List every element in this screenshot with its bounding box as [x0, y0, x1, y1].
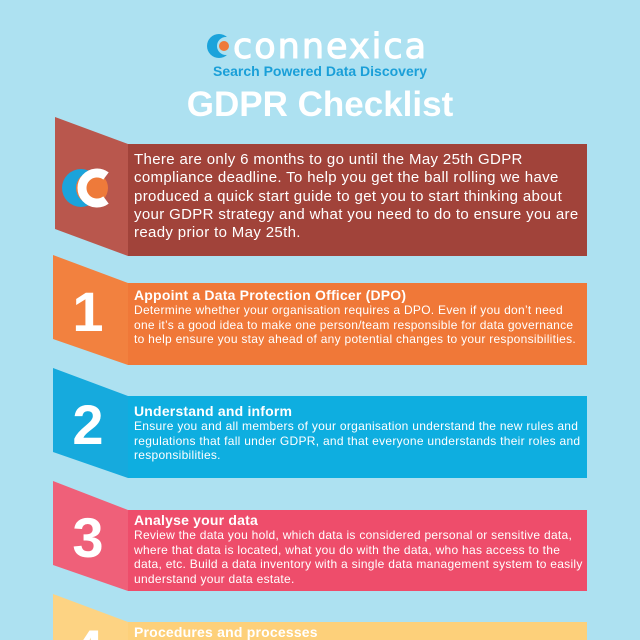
step 3 text: data, etc. Build a data inventory with a single data management system to easily: [134, 557, 583, 571]
intro text: compliance deadline. To help you get the ball rolling we have: [134, 169, 559, 186]
number 3: 3: [72, 506, 104, 569]
step 1 text: to help ensure you stay ahead of any potential changes to your responsibilities.: [134, 332, 576, 346]
step 3 text: [134, 512, 583, 586]
step 2 text: responsibilities.: [134, 448, 221, 462]
step 1 text: [134, 287, 576, 346]
step 1 text: one it’s a good idea to make one person/team responsible for data governance: [134, 318, 573, 332]
step 1 text: Appoint a Data Protection Officer (DPO): [134, 287, 406, 303]
intro text: [134, 151, 579, 241]
step 3 text: Review the data you hold, which data is considered personal or sensitive data,: [134, 528, 572, 542]
number 1: 1: [72, 280, 104, 343]
title: GDPR Checklist: [187, 85, 453, 124]
intro text: produced a quick start guide to get you to start thinking about: [134, 188, 562, 205]
intro text: There are only 6 months to go until the May 25th GDPR: [134, 151, 523, 168]
logo: [207, 27, 428, 67]
intro text: your GDPR strategy and what you need to do to ensure you are: [134, 206, 579, 223]
step 3 text: understand your data estate.: [134, 572, 295, 586]
step 2 text: [134, 403, 580, 462]
subtitle: Search Powered Data Discovery: [213, 63, 427, 79]
icon: C logo: [62, 168, 109, 208]
step 3 text: where that data is located, what you do with the data, who has access to the: [134, 542, 560, 556]
number 2: 2: [72, 393, 104, 456]
logo text: connexica: [233, 27, 428, 67]
step 4 heading: Procedures and processes: [134, 624, 318, 640]
icon: logo circles: [207, 34, 229, 58]
step 2 text: regulations that fall under GDPR, and that everyone understands their roles and: [134, 434, 580, 448]
panel: step 4: [53, 594, 587, 640]
step 2 text: Ensure you and all members of your organisation understand the new rules and: [134, 419, 578, 433]
intro text: ready prior to May 25th.: [134, 224, 301, 241]
step 1 text: Determine whether your organisation requires a DPO. Even if you don’t need: [134, 303, 563, 317]
step 2 text: Understand and inform: [134, 403, 292, 419]
step 3 text: Analyse your data: [134, 512, 258, 528]
